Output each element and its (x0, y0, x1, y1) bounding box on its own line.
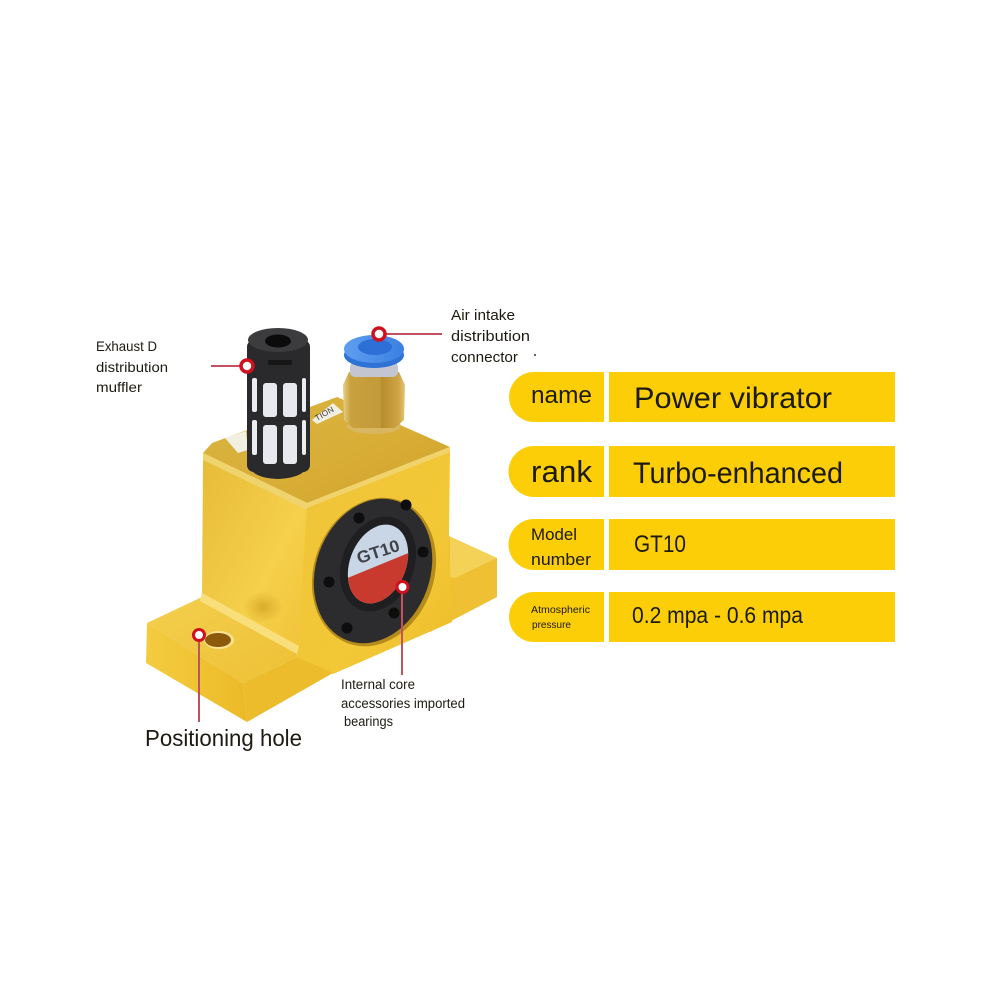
left side face (202, 458, 307, 660)
callout: positioning hole (145, 630, 302, 751)
row: atmospheric pressure: pressure (532, 619, 571, 631)
left foot top (147, 597, 297, 683)
exhaust muffler (247, 328, 310, 479)
nameplate stickers (225, 403, 343, 453)
callout: internal core bearings (341, 582, 465, 729)
callout: air intake connector: connector (451, 349, 518, 366)
callout: internal core bearings: accessories imported (341, 696, 465, 711)
row: rank: rank (531, 454, 592, 489)
front face (297, 452, 452, 674)
nameplate stickers: TION (314, 405, 336, 423)
left foot front (146, 623, 247, 722)
callout: air intake connector: Air intake (451, 307, 515, 324)
mounting hole (204, 631, 234, 649)
right foot (430, 532, 497, 632)
vibrator body (146, 397, 497, 722)
row: model number: GT10 (634, 531, 686, 558)
row: name (509, 372, 895, 422)
row: atmospheric pressure: Atmospheric (531, 604, 590, 616)
illustration: GT10 turbo vibrator product (146, 328, 497, 722)
front disc: GT10 (354, 536, 402, 568)
callout: internal core bearings: Internal core (341, 677, 415, 692)
spec table (509, 372, 895, 642)
row: model number (509, 519, 895, 570)
front disc (312, 498, 436, 646)
row: rank: Turbo-enhanced (633, 457, 843, 490)
top face (203, 397, 450, 503)
callout: air intake connector (373, 307, 536, 366)
callout: exhaust muffler: muffler (96, 379, 142, 395)
callout: exhaust muffler (96, 338, 253, 395)
row: name: name (531, 382, 592, 409)
callout: air intake connector: distribution (451, 328, 530, 345)
callout: exhaust muffler: distribution (96, 359, 168, 375)
row: rank (509, 446, 895, 497)
row: model number: number (531, 550, 591, 569)
GT10 badge (348, 524, 408, 604)
callout: exhaust muffler: Exhaust D (96, 338, 157, 354)
row: model number: Model (531, 525, 577, 544)
row: name: Power vibrator (634, 382, 832, 415)
row: atmospheric pressure: 0.2 mpa - 0.6 mpa (632, 602, 803, 628)
callout: positioning hole: Positioning hole (145, 725, 302, 751)
callout: internal core bearings: bearings (344, 714, 393, 729)
row: atmospheric pressure (509, 592, 895, 642)
air intake connector (343, 335, 405, 434)
